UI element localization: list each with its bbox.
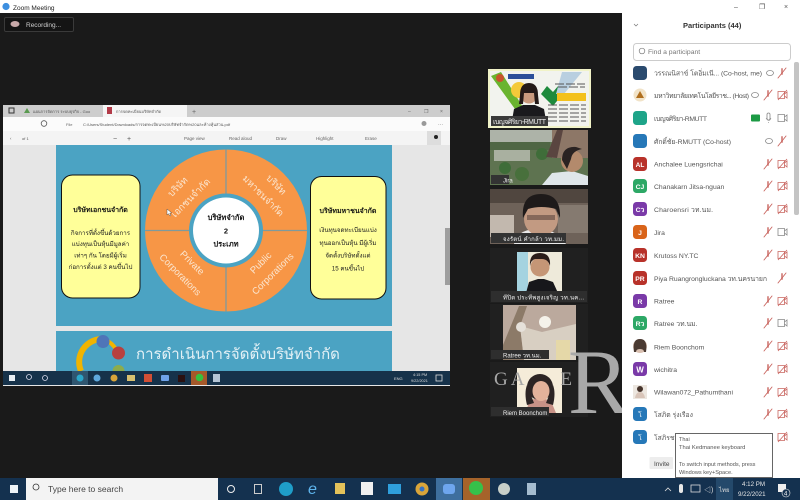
window controls: –	[734, 4, 738, 11]
panel scrollbar	[794, 62, 799, 215]
row: Piya: PR	[635, 276, 645, 283]
watermark: GAME R: R	[568, 331, 630, 433]
segment labels: บริษัท	[264, 173, 288, 197]
pdf toolbar: of 1	[22, 136, 29, 141]
recording cloud icons	[752, 70, 774, 144]
system tray: ไทย	[718, 486, 730, 494]
row: Riem	[633, 339, 705, 353]
video tile: garden participant	[490, 130, 588, 185]
row: wichitra	[633, 362, 677, 376]
pdf toolbar	[3, 131, 450, 145]
row: co-host: ศักดิ์ชัย-RMUTT (Co-host)	[654, 136, 731, 146]
watermark: GAME R	[494, 331, 630, 433]
invite button	[650, 457, 673, 469]
row: host: มหาวิทยาลัยเทคโนโลยีราช... (Host)	[654, 91, 749, 100]
row: Ratree 2: Ratree วท.นม.	[654, 321, 698, 328]
taskbar app icons: e	[308, 481, 317, 498]
row: Krutoss: KN	[635, 253, 645, 260]
system tray: ◁)	[704, 486, 713, 494]
card: private company: แบ่งทุนเป็นหุ้นมีมูลค่า	[72, 239, 129, 248]
row: Riem: Riem Boonchom	[654, 344, 705, 352]
row: co-host	[633, 134, 731, 148]
browser tab bar	[3, 105, 450, 117]
browser tab bar: ×	[440, 109, 443, 115]
pdf toolbar: +	[127, 136, 131, 143]
segment labels: มหาชนจำกัด	[240, 173, 286, 219]
row: co-host me	[633, 66, 762, 80]
card: public company: บริษัทมหาชนจำกัด	[320, 207, 377, 215]
row: blue 2	[633, 430, 680, 444]
browser tab bar: แผนการจัดการ ระบบธุรกิจ - Goo	[33, 109, 91, 115]
card: public company: ทุนออกเป็นหุ้น มีผู้เริ่ม	[319, 238, 377, 247]
recording badge: Recording...	[26, 22, 61, 29]
watermark: GAME R: E	[560, 369, 572, 390]
row: Charoensri: Charoensri วท.นม.	[654, 207, 713, 214]
browser tab bar: +	[192, 109, 196, 116]
row: blue 2: โสภิรชน	[654, 433, 680, 442]
address bar: ···	[438, 122, 443, 128]
keyboard tooltip: Thai Kedmanee keyboard	[679, 445, 745, 451]
row: Charoensri	[633, 202, 713, 216]
row: Ratree 2	[633, 316, 698, 330]
donut centre label: 2	[224, 226, 228, 236]
browser tab bar: ❐	[424, 109, 429, 115]
video tile: man with glasses: จงรัตน์ คำกล้า วท.มม.	[503, 235, 564, 243]
pdf slide: company types	[56, 145, 392, 326]
row: Anchalee	[633, 157, 723, 171]
search box	[634, 44, 790, 60]
segment labels: Corporations	[157, 252, 203, 299]
row: speaker	[633, 111, 707, 125]
row: co-host me: วรรณนิสาข์ โตอิ่มเนี... (Co-host, me)	[654, 68, 762, 78]
donut centre label	[208, 213, 244, 248]
video tile: garden participant: Jira	[503, 178, 513, 184]
pdf toolbar: Highlight	[316, 136, 334, 141]
shared windows taskbar: ENG	[394, 376, 403, 381]
window controls	[734, 3, 788, 11]
donut chart	[145, 150, 307, 312]
pdf toolbar: −	[113, 136, 117, 143]
row: Ratree	[633, 294, 675, 308]
active status icons	[751, 113, 787, 326]
recording badge	[4, 18, 74, 32]
search box: Type here to search	[48, 484, 123, 494]
card: private company: ก่อการตั้งแต่ 3 คนขึ้นไป	[69, 262, 132, 271]
card: private company: กิจการที่ตั้งขึ้นด้วยการ	[71, 228, 131, 237]
donut centre label: บริษัทจำกัด	[208, 213, 244, 222]
segment labels: Corporations	[250, 251, 297, 297]
browser window	[3, 105, 450, 386]
keyboard tooltip: Windows key+Space.	[679, 470, 733, 476]
card: public company	[310, 176, 386, 299]
pdf scrollbar	[445, 228, 450, 285]
row: host	[634, 88, 749, 102]
panel collapse chevron	[634, 24, 638, 26]
row: blue 1	[633, 407, 693, 421]
row: Jira: J	[638, 230, 642, 237]
segment labels: บริษัท	[166, 175, 190, 199]
taskbar app icons	[228, 478, 536, 500]
row: Wilawan: Wilawan072_Pathumthani	[654, 390, 733, 396]
mouse cursor	[167, 209, 172, 216]
row: Piya: Piya Ruangrongluckana วท.นครนายก	[654, 276, 767, 283]
title bar	[0, 0, 800, 13]
address bar: C:/Users/Student/Downloads/การจดทะเบียน%20บริษัทจำกัด%20และห้างหุ้นส่วน.pdf	[83, 122, 231, 128]
segment labels: เอกชนจำกัด	[169, 176, 213, 220]
row: Krutoss: Krutoss NY.TC	[654, 253, 699, 260]
card: private company: เท่าๆ กัน โดยมีผู้เริ่ม	[74, 252, 127, 260]
card: public company: 15 คนขึ้นไป	[332, 264, 364, 272]
row: speaker: เบญจศิริยา-RMUTT	[654, 115, 707, 123]
shared windows taskbar	[3, 371, 450, 385]
pdf toolbar: Page view	[184, 136, 206, 141]
pdf slide: next page heading: การดำเนินการจัดตั้งบริษัทจำกัด	[136, 343, 340, 363]
panel header: Participants (44)	[683, 21, 742, 30]
row: Piya	[633, 271, 767, 285]
search box: Find a participant	[648, 49, 700, 56]
row: Anchalee: AL	[636, 162, 644, 169]
video tile: smiling woman	[490, 362, 588, 417]
row: Charoensri: Cว	[636, 207, 645, 214]
pdf toolbar: ‹	[10, 136, 12, 141]
row: Chanakarn: Chanakarn Jitsa-nguan	[654, 184, 724, 191]
search box	[26, 478, 218, 500]
row: blue 1: โ	[638, 410, 642, 419]
row: Anchalee: Anchalee Luengsrichai	[654, 162, 723, 168]
keyboard tooltip	[676, 434, 772, 478]
donut centre label: ประเภท	[213, 240, 239, 248]
pdf toolbar: Read aloud	[229, 136, 253, 141]
row: wichitra: W	[636, 366, 644, 374]
pdf toolbar: Erase	[365, 136, 377, 141]
watermark: GAME R: GA	[494, 369, 527, 390]
address bar: File	[66, 122, 73, 127]
title bar: Zoom Meeting	[13, 5, 55, 12]
system tray: 4:12 PM	[742, 481, 765, 488]
card: public company: จัดตั้งบริษัทตั้งแต่	[325, 250, 371, 260]
card: private company: บริษัทเอกชนจำกัด	[73, 206, 128, 214]
system tray: 4	[784, 492, 788, 498]
browser tab bar: –	[408, 109, 411, 115]
stopped camera icons	[778, 90, 787, 442]
row: Chanakarn	[633, 179, 724, 193]
shared windows taskbar: 4:15 PM	[413, 373, 427, 377]
row: Ratree: R	[638, 299, 643, 306]
row: Krutoss	[633, 248, 699, 262]
video tile: young man: ทีปิต ประทีพสูงเจริญ วท.นค...	[503, 294, 584, 302]
row: Chanakarn: CJ	[636, 184, 645, 191]
pdf toolbar: Draw	[276, 136, 287, 141]
keyboard tooltip: To switch input methods, press	[679, 462, 756, 468]
window controls: ×	[784, 4, 788, 11]
video tile: active speaker	[488, 69, 591, 128]
row: blue 1: โสภิต รุ่งเรือง	[654, 410, 693, 419]
system tray	[665, 478, 790, 500]
segment labels: Public	[248, 250, 274, 276]
segment labels	[157, 173, 297, 299]
segment labels: Private	[177, 249, 206, 278]
system tray: 9/22/2021	[738, 491, 766, 498]
row: Jira: Jira	[654, 230, 665, 237]
video tile: young man	[490, 248, 588, 303]
video tile: ceiling view	[490, 304, 588, 360]
row: Wilawan	[633, 385, 733, 399]
video tile: active speaker: เบญจศิริยา-RMUTT	[493, 118, 547, 126]
row: Ratree: Ratree	[654, 298, 675, 306]
start icon	[10, 485, 18, 493]
pdf slide: next page heading	[56, 331, 392, 377]
keyboard tooltip: Thai	[679, 437, 690, 443]
participants panel	[622, 0, 800, 478]
invite button: Invite	[654, 461, 670, 468]
participant rows	[633, 66, 767, 444]
address bar	[3, 117, 450, 131]
card: private company	[62, 175, 140, 298]
muted microphone icons	[764, 68, 786, 419]
row: wichitra: wichitra	[653, 367, 677, 374]
card: public company: เงินทุนจดทะเบียนแบ่ง	[319, 226, 377, 234]
row: Ratree 2: Rว	[636, 321, 645, 328]
windows taskbar	[0, 478, 800, 500]
video tile: man with glasses	[490, 189, 588, 244]
row: blue 2: โ	[638, 433, 642, 442]
video tile: smiling woman: Riem Boonchom	[503, 411, 547, 417]
row: Jira	[633, 225, 665, 239]
shared windows taskbar: 9/22/2021	[411, 379, 428, 383]
browser tab bar: การจดทะเบียนบริษัทจำกัด	[116, 109, 162, 114]
video tile: ceiling view: Ratree วท.นม.	[503, 354, 542, 360]
window controls: ❐	[759, 3, 765, 11]
